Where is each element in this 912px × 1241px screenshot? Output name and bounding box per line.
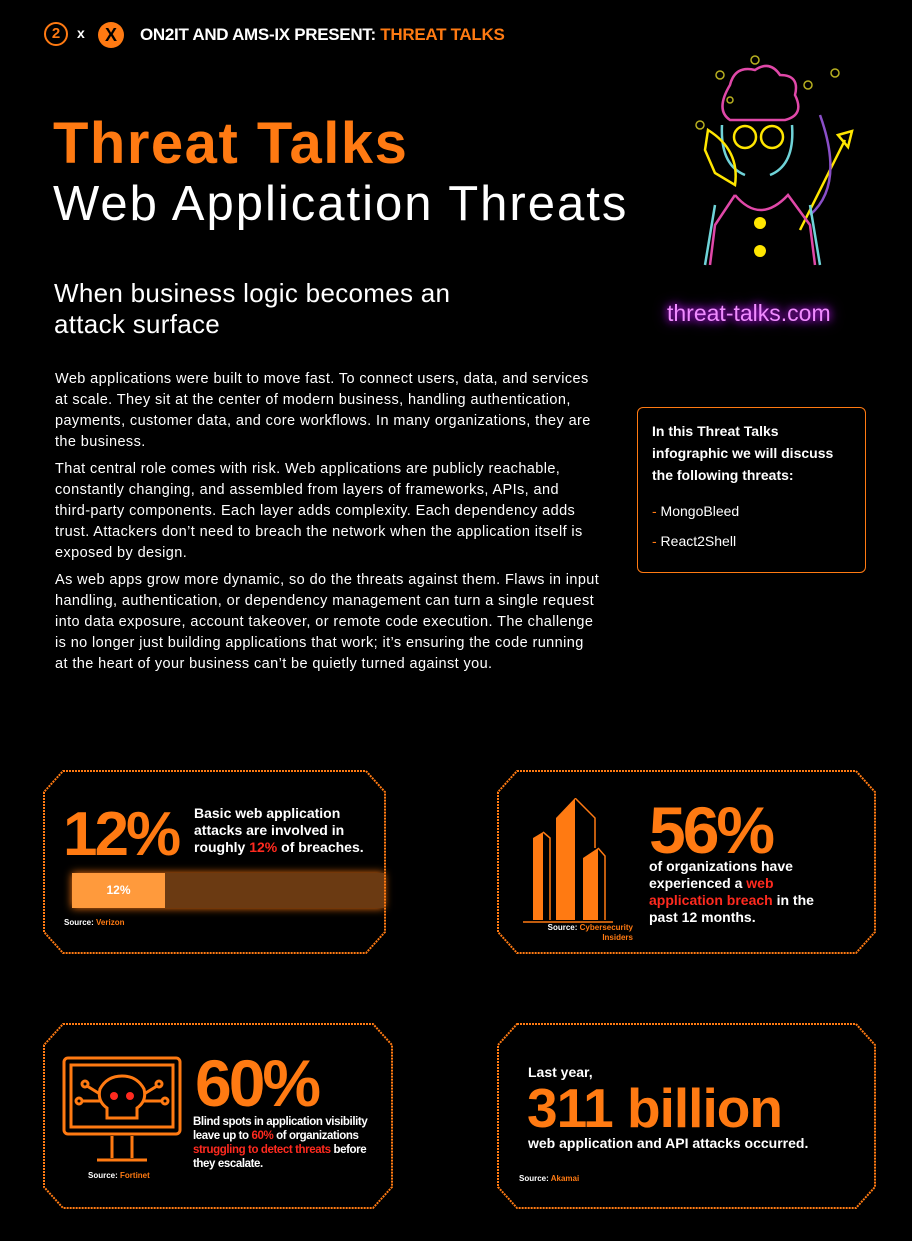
panel: stat 311 billion: web application and API attacks occurred. xyxy=(528,1135,808,1151)
text block: intro: exposed by design. xyxy=(55,545,187,561)
panel: stat 311 billion: Last year, xyxy=(528,1064,593,1080)
title: Threat Talks xyxy=(53,111,408,176)
illustration: cupid character xyxy=(695,55,854,266)
text block: intro: Web applications were built to move fast. To connect users, data, and services xyxy=(55,371,589,387)
icon: ams-ix logo xyxy=(98,22,124,48)
panel: threats list xyxy=(637,407,866,573)
text block: intro: constantly changing, and assembled from layers of frameworks, APIs, and xyxy=(55,482,559,498)
title xyxy=(53,111,628,231)
panel: stat 56%: of organizations have experienced a web application breach in the past 12 months. xyxy=(649,858,814,925)
panel: stat 56%: 56% xyxy=(649,793,772,867)
source: Source: Verizon xyxy=(64,918,124,927)
panel: stat 311 billion: Source: Akamai xyxy=(519,1174,579,1183)
header logos: x xyxy=(77,25,85,41)
icon: monitor with skull xyxy=(62,1056,182,1162)
panel: stat 56%: Source: Cybersecurity xyxy=(548,923,633,932)
text block: intro: trust. Attackers don’t need to breach the network when the application itself is xyxy=(55,524,583,540)
text block: intro: at the heart of your business can’t be quietly turned against you. xyxy=(55,656,492,672)
text block: intro: is no longer just building applications that work; it’s ensuring the code running xyxy=(55,635,584,651)
link: threat-talks.com: threat-talks.com xyxy=(667,300,831,326)
panel: stat 12% xyxy=(43,770,392,954)
panel: stat 311 billion xyxy=(497,1023,876,1209)
title: Web Application Threats xyxy=(53,177,628,231)
text block: intro: the business. xyxy=(55,434,146,450)
panel: threats list: - React2Shell xyxy=(652,533,736,549)
panel: stat 56%: Insiders xyxy=(602,933,633,942)
panel: threats list: In this Threat Talks infographic we will discuss the following threats: xyxy=(652,423,833,483)
icon: buildings xyxy=(523,798,613,923)
text block: intro: third-party components. Each layer adds complexity. Each dependency adds xyxy=(55,503,575,519)
panel: stat 60%: Source: Fortinet xyxy=(88,1171,150,1180)
bar chart: 12% xyxy=(106,883,131,897)
stat number: 12% xyxy=(63,800,178,869)
panel: stat 60%: 60% xyxy=(195,1046,318,1120)
text block: intro: That central role comes with risk. Web applications are publicly reachable, xyxy=(55,461,560,477)
text block: intro: into data exposure, account takeover, or remote code execution. The challenge xyxy=(55,614,593,630)
panel: stat 311 billion: 311 billion xyxy=(527,1077,782,1139)
text block: intro: handling, authentication, or dependency management can turn a single request xyxy=(55,593,594,609)
text block: intro xyxy=(55,371,599,672)
icon: on2it logo xyxy=(44,22,68,46)
text block: intro: As web apps grow more dynamic, so do the threats against them. Flaws in input xyxy=(55,572,599,588)
subtitle: When business logic becomes an attack surface xyxy=(54,278,450,339)
text block: intro: payments, customer data, and core workflows. In many organizations, they are xyxy=(55,413,591,429)
icon: ams-ix logo: X xyxy=(105,25,117,45)
panel: stat 60%: Blind spots in application visibility leave up to 60% of organizations struggling to detect threats before they escalate. xyxy=(193,1116,367,1170)
text block: intro: at scale. They sit at the center of modern business, handling authentication, xyxy=(55,392,571,408)
stat text: Basic web application attacks are involved in roughly 12% of breaches. xyxy=(194,805,364,855)
icon: on2it logo: 2 xyxy=(52,25,60,42)
panel: stat 60% xyxy=(43,1023,393,1209)
header logos xyxy=(44,22,504,48)
header text: ON2IT AND AMS-IX PRESENT: THREAT TALKS xyxy=(140,25,504,44)
bar chart xyxy=(72,873,384,908)
panel: stat 56% xyxy=(497,770,876,954)
panel: threats list: - MongoBleed xyxy=(652,503,739,519)
